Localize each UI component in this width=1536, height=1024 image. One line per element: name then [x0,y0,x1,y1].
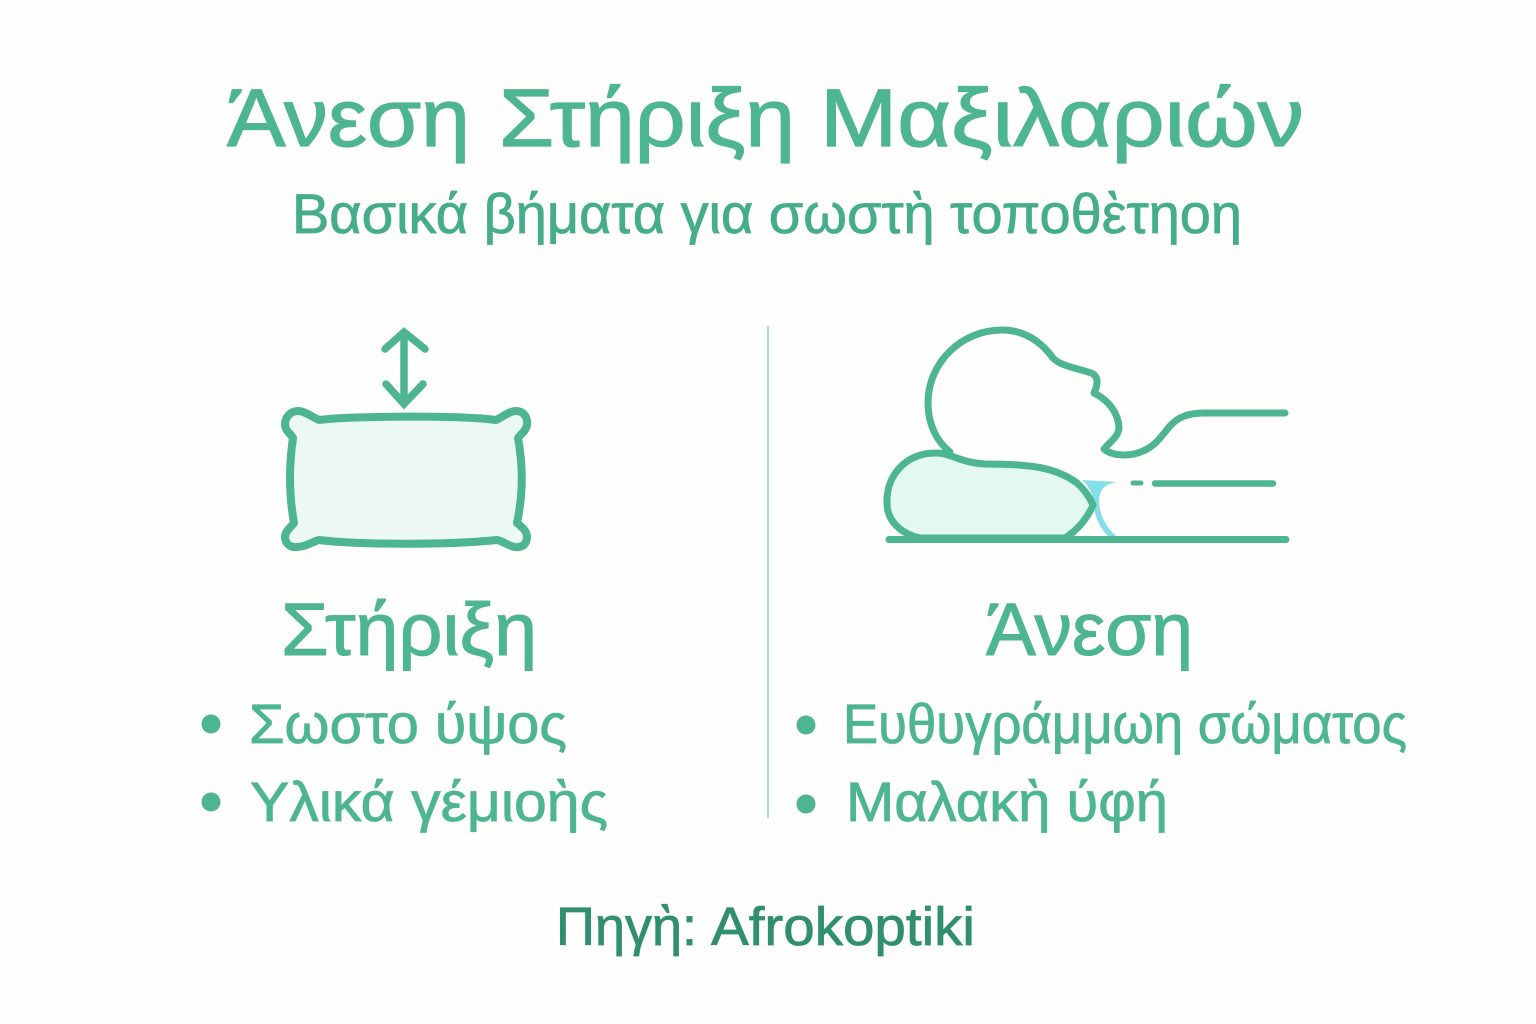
title: Στήριξη [499,73,795,164]
source footer [556,897,975,957]
heading: support: Στήριξη [281,588,537,671]
icon: pillow under head [887,453,1093,538]
subtitle: Βασικά βήματα για σωστὴ τοποθὲτηοη [292,182,1242,245]
icon: double arrow [385,332,425,404]
icon: head and neck outline [928,330,1285,455]
icon: body lines [889,483,1286,540]
icon: pillow [285,411,527,547]
bullet: correct height: Σωστο ύψος [249,692,567,755]
title: Μαξιλαριών [820,73,1304,164]
panel: support [202,332,608,833]
source footer: Afrokoptiki [711,897,975,957]
icon: pillow with height arrow [285,332,527,547]
bullet: soft texture: Μαλακὴ ύφή [846,770,1168,833]
panel: comfort [796,330,1407,833]
title: Άνεση [227,73,470,164]
bullet: body alignment: Ευθυγράμμωη σώματος [843,692,1407,755]
icon: head resting on pillow [887,330,1286,540]
bullet: filling materials: Υλικά γέμιοὴς [250,770,608,833]
title [227,73,1304,164]
source footer: Πηγὴ: [556,897,697,957]
icon: spine highlight [1082,480,1117,536]
heading: comfort: Άνεση [986,588,1193,671]
